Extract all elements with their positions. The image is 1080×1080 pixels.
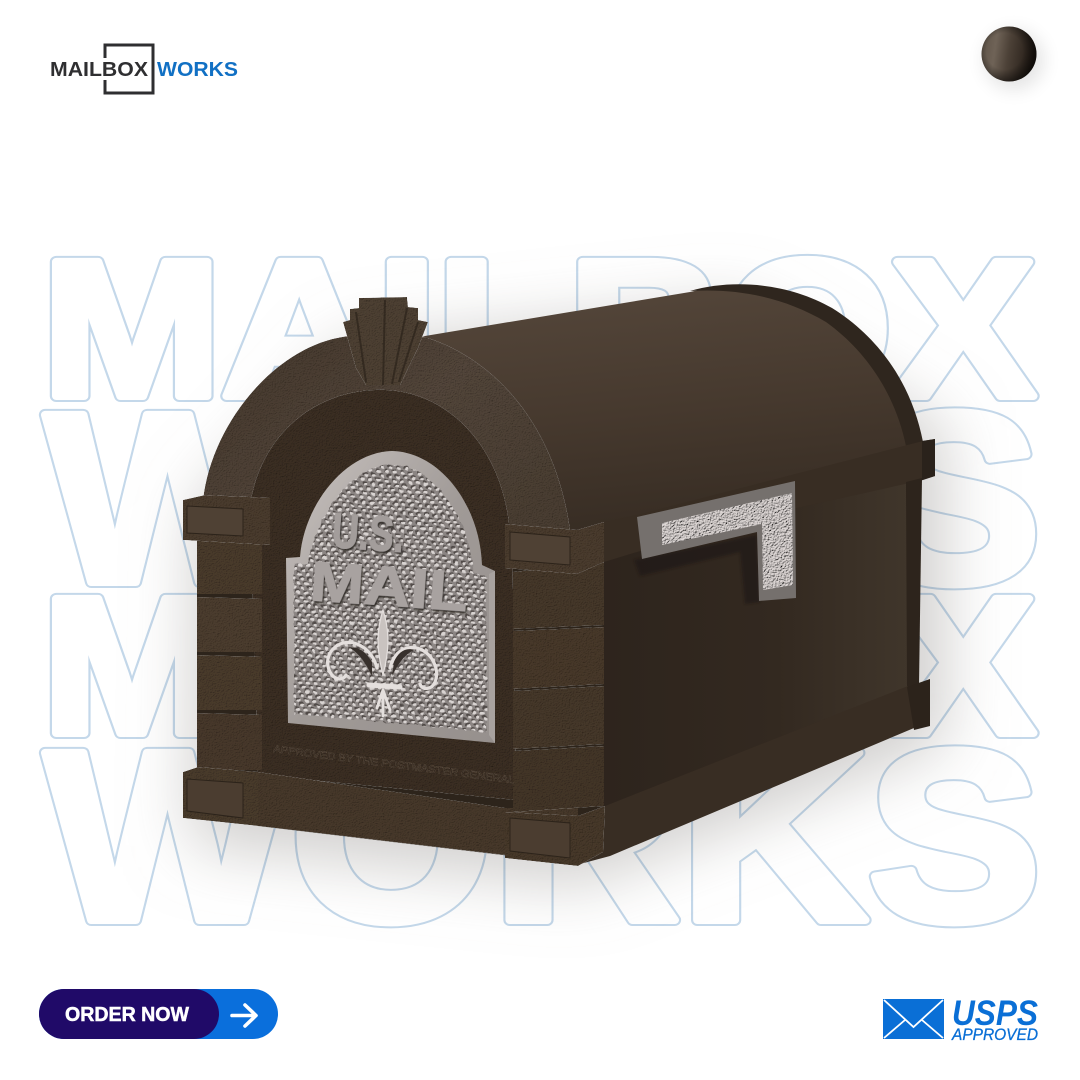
logo word: MAILBOX: MAILBOX	[50, 58, 148, 81]
watermark inner knockout	[42, 220, 1041, 972]
plate right edge	[489, 571, 495, 743]
flag shadow	[634, 535, 760, 604]
rear rim of dome	[690, 284, 923, 446]
front face: recess	[250, 386, 516, 800]
right pillar brick 4	[513, 746, 604, 812]
mailbox soft shadow	[190, 305, 945, 885]
fleur-de-lis ornament	[328, 610, 437, 716]
left pillar brick 3	[197, 655, 262, 710]
left pillar	[183, 495, 270, 826]
flag	[637, 481, 796, 601]
usps approved badge	[883, 994, 1038, 1044]
left pillar brick 2	[197, 597, 262, 652]
left pillar capital	[183, 495, 270, 545]
side strap	[604, 439, 935, 562]
button navy pill	[39, 989, 219, 1039]
left pillar base	[183, 767, 258, 826]
finial stepped fan	[343, 297, 428, 385]
colour swatch	[982, 26, 1044, 90]
lettering: U.S.: U.S.	[330, 504, 406, 563]
watermark line: MAILBOX repeat: MAILBOX	[42, 557, 1035, 775]
rear strap end	[922, 439, 935, 480]
rear vertical post	[906, 478, 922, 688]
logo box	[105, 45, 153, 93]
plate hammered field	[294, 464, 487, 732]
watermark inner knockout: MAILBOX	[42, 557, 1035, 775]
logo	[50, 45, 238, 93]
button blue pill	[39, 989, 278, 1039]
bottom sill	[258, 772, 578, 860]
finial	[343, 297, 428, 385]
button arrow icon	[232, 1005, 256, 1026]
embossed line: approved by the postmaster general: APPROVED BY THE POSTMASTER GENERAL	[273, 744, 515, 786]
logo word: WORKS: WORKS	[157, 58, 238, 81]
rear foot	[907, 679, 930, 730]
order now button	[39, 989, 278, 1039]
mailbox body: side panel	[560, 438, 922, 864]
right pillar brick 1	[513, 562, 604, 629]
watermark inner knockout: WORKS	[45, 701, 1041, 972]
left pillar brick 4	[197, 713, 262, 770]
watermark outlines	[42, 220, 1041, 972]
watermark inner knockout: MAILBOX	[42, 220, 1035, 438]
left pillar brick 1	[197, 540, 262, 594]
flag hammered inlay	[662, 493, 793, 590]
finial shading	[356, 300, 418, 385]
right pillar base	[505, 806, 605, 866]
right pillar	[505, 522, 605, 866]
watermark line: WORKS repeat: WORKS	[45, 701, 1041, 972]
flag body	[637, 481, 796, 601]
door plate	[286, 451, 495, 743]
lettering: MAIL: MAIL	[308, 549, 470, 623]
plate rim	[286, 451, 495, 743]
envelope icon	[883, 999, 944, 1039]
right pillar brick 3	[513, 686, 604, 749]
usps wordmark: USPS	[952, 994, 1038, 1033]
approved wordmark: APPROVED	[951, 1025, 1038, 1044]
mailbox body: dome	[400, 287, 908, 540]
watermark outlined text	[42, 220, 1041, 972]
right pillar capital	[505, 522, 604, 574]
watermark inner knockout: WORKS	[45, 363, 1041, 634]
front face: backing	[197, 540, 604, 864]
front face: arch	[203, 336, 570, 535]
button label: ORDER NOW	[65, 1004, 189, 1026]
watermark line: WORKS: WORKS	[45, 363, 1041, 634]
mailbox	[183, 284, 935, 866]
right pillar brick 2	[513, 627, 604, 689]
watermark line: MAILBOX: MAILBOX	[42, 220, 1035, 438]
lower side strap	[575, 686, 914, 864]
